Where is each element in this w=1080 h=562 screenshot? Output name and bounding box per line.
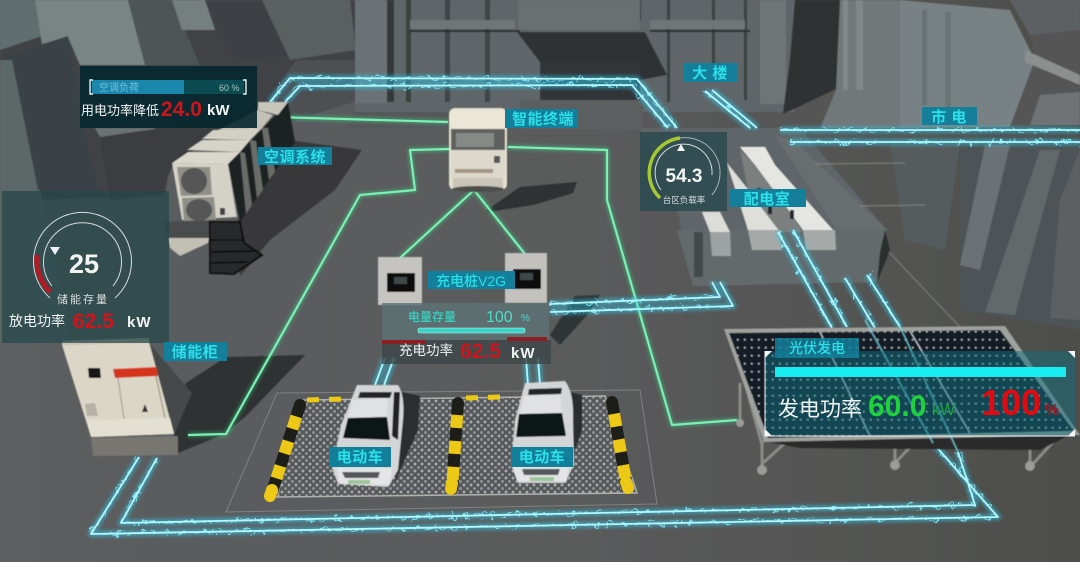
cyan power lines [91,78,1080,534]
label: 大楼 [684,63,737,82]
label: 电动车 right [511,447,573,467]
panel: solar generation [765,351,1075,436]
storage cabinet shadow [174,355,305,453]
panel: charging pile: 62.5 [460,340,501,363]
wheel stops [270,397,628,496]
gauge [34,212,132,298]
charge bar [418,328,525,333]
label: 电动车 left: 电动车 [337,448,383,466]
label: 配电室: 配电室 [744,190,790,208]
generation bar [775,367,1066,377]
panel: energy storage gauge: kW [127,314,152,331]
parking mat [277,396,637,497]
panel: charging pile: % [521,313,530,324]
panel: transformer load rate: 台区负载率 [663,195,706,205]
load bar [90,80,246,94]
air conditioner shadow [238,140,362,276]
panel: transformer load rate: 54.3 [666,166,702,187]
storage cabinet [62,338,192,456]
building: right glass blocks [783,0,1080,330]
label: 大楼: 大 楼 [692,64,728,82]
panel: charging pile: 100 [486,309,513,326]
air conditioning units [164,102,295,256]
building: central tower [355,0,795,130]
green data lines [188,117,737,435]
panel: solar generation: 发电功率 [778,398,862,421]
panel: air conditioning load: 24.0 [161,98,202,121]
panel: solar generation: 60.0 [868,390,926,423]
panel: energy storage gauge [2,191,169,343]
panel: charging pile [382,303,551,364]
label: 储能柜 [164,342,227,361]
terminal shadow [487,182,577,212]
distribution room glass box [640,128,960,327]
panel: charging pile: 充电功率 [399,342,453,358]
panel: energy storage gauge: 25 [69,249,99,279]
label: 市电 [922,107,977,126]
charging piles [378,253,547,305]
panel: air conditioning load [80,66,257,128]
pile shadow [550,295,600,345]
stairs [210,222,262,274]
panel: transformer load rate [640,132,727,211]
panel: charging pile: 电量存量 [408,310,456,324]
label: 市电: 市 电 [931,108,967,126]
load bar: 60 % [219,83,240,93]
panel: solar generation: 100 [981,382,1041,423]
label: 电动车 right: 电动车 [519,448,565,466]
parking outline [226,390,657,512]
label: 储能柜: 储能柜 [172,343,218,361]
label: 电动车 left [329,447,391,467]
label: 充电桩V2G: 充电桩V2G [436,273,506,289]
load bar: 空调负荷 [99,81,139,94]
panel: air conditioning load: kW [207,102,230,119]
smart terminal [449,108,507,192]
label: 光伏发电: 光伏发电 [789,340,845,356]
car left [332,385,420,487]
panel: charging pile: kW [511,345,536,362]
label: 光伏发电 [775,338,859,358]
panel: energy storage gauge: 储能存量 [57,292,109,306]
label: 空调系统: 空调系统 [264,148,326,166]
panel: solar generation: % [1045,402,1059,419]
panel: energy storage gauge: 放电功率 [9,313,65,329]
power text: 用电功率降低 [81,103,159,118]
label: 智能终端: 智能终端 [512,110,574,128]
panel: solar generation: kW [932,402,956,419]
label: 配电室 [730,189,806,208]
car right [511,381,582,483]
panel: energy storage gauge: 62.5 [73,310,114,333]
solar array [724,320,1080,475]
